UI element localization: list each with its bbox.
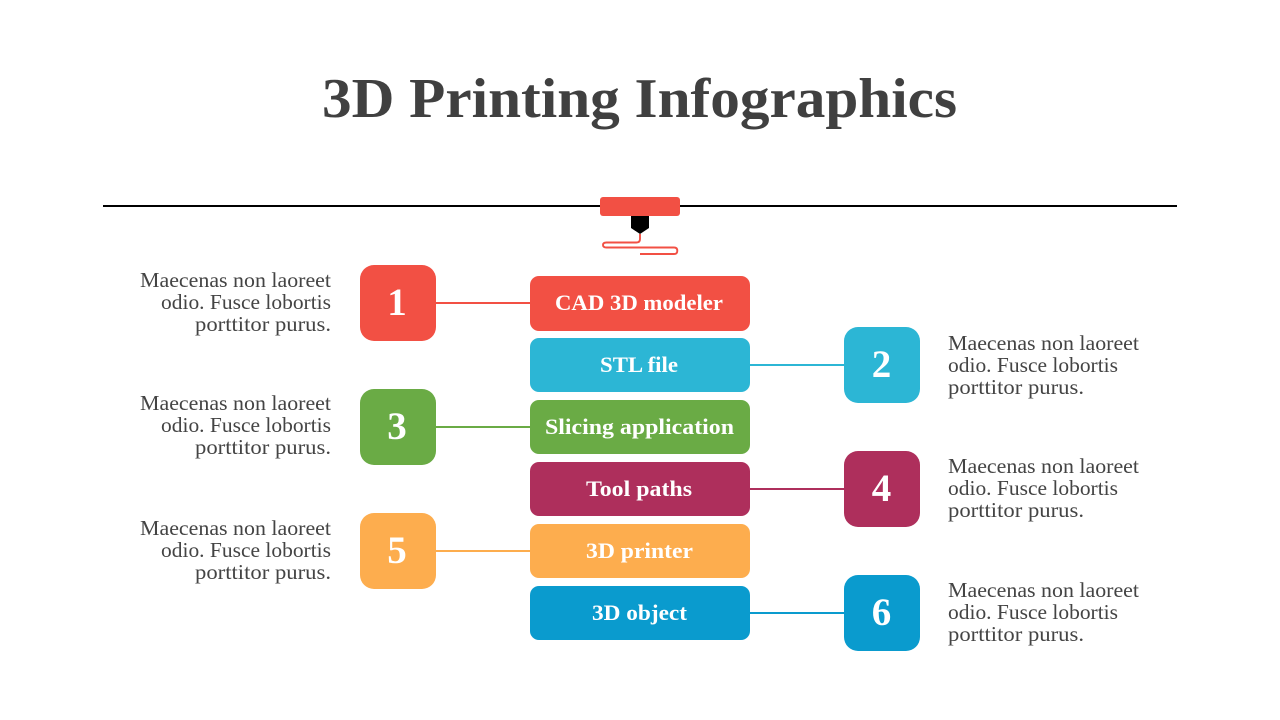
text block 4 <box>948 454 1139 522</box>
text block 3: odio. Fusce lobortis <box>161 413 331 437</box>
title: 3D Printing Infographics <box>322 68 957 130</box>
text block 5: odio. Fusce lobortis <box>161 538 331 562</box>
text block 1: odio. Fusce lobortis <box>161 290 331 314</box>
text block 6: porttitor purus. <box>948 622 1084 646</box>
number badge 2: 2 <box>872 343 891 386</box>
connector 5 <box>436 550 530 552</box>
connector 2 <box>750 364 844 366</box>
text block 1: porttitor purus. <box>195 312 331 336</box>
text block 4: Maecenas non laoreet <box>948 454 1139 478</box>
step bar: Slicing application <box>530 400 750 454</box>
connector 1 <box>436 302 530 304</box>
text block 5: Maecenas non laoreet <box>140 516 331 540</box>
text block 2: odio. Fusce lobortis <box>948 353 1118 377</box>
number badge 3: 3 <box>387 405 407 448</box>
number badge 4 <box>844 451 920 527</box>
connector 6 <box>750 612 844 614</box>
text block 2 <box>948 331 1139 399</box>
step bar: CAD 3D modeler <box>530 276 750 331</box>
step bar: CAD 3D modeler: CAD 3D modeler <box>555 290 723 315</box>
step bar: 3D printer <box>530 524 750 578</box>
text block 2: porttitor purus. <box>948 375 1084 399</box>
text block 4: porttitor purus. <box>948 498 1084 522</box>
step bar: STL file: STL file <box>600 352 678 377</box>
number badge 4: 4 <box>872 467 891 510</box>
step bar: Slicing application: Slicing application <box>545 414 735 439</box>
step bar: STL file <box>530 338 750 392</box>
text block 3 <box>140 391 331 459</box>
text block 2: Maecenas non laoreet <box>948 331 1139 355</box>
number badge 1: 1 <box>387 281 407 324</box>
step bar: Tool paths: Tool paths <box>586 476 692 501</box>
text block 1: Maecenas non laoreet <box>140 268 331 292</box>
text block 1 <box>140 268 331 336</box>
text block 6 <box>948 578 1139 646</box>
number badge 6 <box>844 575 920 651</box>
number badge 2 <box>844 327 920 403</box>
step bar: 3D printer: 3D printer <box>586 538 693 563</box>
step bar: Tool paths <box>530 462 750 516</box>
text block 3: Maecenas non laoreet <box>140 391 331 415</box>
connector 3 <box>436 426 530 428</box>
text block 6: odio. Fusce lobortis <box>948 600 1118 624</box>
number badge 6: 6 <box>872 591 891 634</box>
text block 3: porttitor purus. <box>195 435 331 459</box>
number badge 3 <box>360 389 436 465</box>
text block 6: Maecenas non laoreet <box>948 578 1139 602</box>
printer rail <box>103 205 1177 207</box>
step bar: 3D object <box>530 586 750 640</box>
number badge 5 <box>360 513 436 589</box>
text block 5 <box>140 516 331 584</box>
number badge 5: 5 <box>387 529 407 572</box>
text block 5: porttitor purus. <box>195 560 331 584</box>
connector 4 <box>750 488 844 490</box>
step bar: 3D object: 3D object <box>592 600 688 625</box>
text block 4: odio. Fusce lobortis <box>948 476 1118 500</box>
number badge 1 <box>360 265 436 341</box>
icon: printer head <box>600 197 680 254</box>
